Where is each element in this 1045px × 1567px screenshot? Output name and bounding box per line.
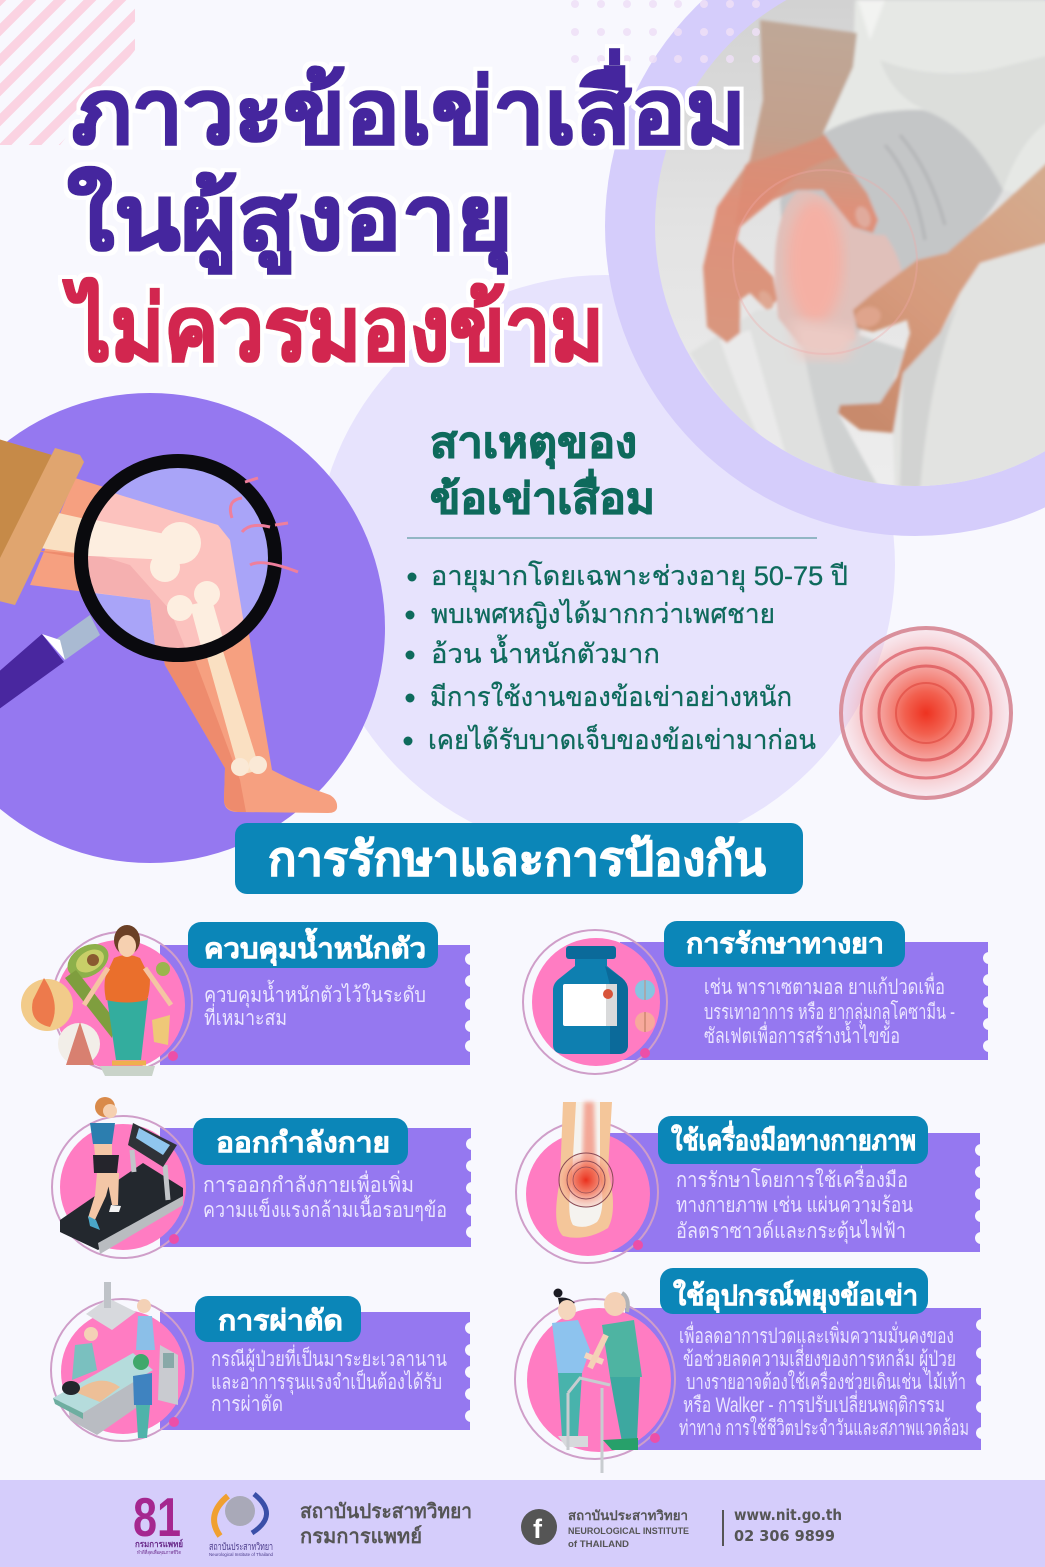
list: causes: มีการใช้งานของข้อเข่าอย่างหนัก	[430, 681, 792, 712]
card: surgery: การผ่าตัด	[218, 1305, 343, 1336]
purple circle with leg illustration	[0, 393, 385, 863]
facebook page name: NEUROLOGICAL INSTITUTE	[568, 1526, 689, 1536]
card: physical therapy: การรักษาโดยการใช้เครื่องมือ	[676, 1165, 908, 1192]
lower-left fabric	[690, 310, 903, 490]
card: physical therapy: อัลตราซาวด์และกระตุ้นไฟฟ้า	[676, 1219, 906, 1244]
large pale circle behind causes	[315, 275, 895, 855]
card: surgery: กรณีผู้ป่วยที่เป็นมาระยะเวลานาน	[211, 1344, 447, 1372]
icon: avocado	[61, 937, 115, 985]
card: physical therapy: ทางกายภาพ เช่น แผ่นความร้อน	[676, 1194, 913, 1217]
card: knee support: ข้อช่วยลดความเสี่ยงของการหกล้ม ผู้ป่วย	[683, 1344, 956, 1372]
card: exercise: ความแข็งแรงกล้ามเนื้อรอบๆข้อ	[203, 1195, 447, 1222]
title line 2: ในผู้สูงอายุ	[67, 167, 513, 275]
card: knee support: หรือ Walker - การปรับเปลี่ยนพฤติกรรม	[683, 1390, 945, 1417]
icon: ankle with pain rings	[556, 1102, 613, 1238]
lower-right trouser	[892, 358, 1045, 486]
facebook page name: สถาบันประสาทวิทยา	[568, 1508, 688, 1523]
heading: causes: สาเหตุของ	[430, 419, 637, 469]
shirt	[825, 0, 1045, 200]
card: exercise: ออกกำลังกาย	[216, 1127, 390, 1158]
contact details: www.nit.go.th	[734, 1506, 842, 1524]
card: weight control: ที่เหมาะสม	[204, 1003, 287, 1030]
heading: treatment and prevention	[235, 823, 803, 894]
card: medication: เช่น พาราเซตามอล ยาแก้ปวดเพื่อ	[704, 972, 945, 999]
organisation name: สถาบันประสาทวิทยา	[300, 1501, 472, 1523]
title line 3: ไม่ควรมองข้าม	[63, 278, 604, 380]
list: causes: พบเพศหญิงได้มากกว่าเพศชาย	[431, 599, 775, 629]
list: causes: เคยได้รับบาดเจ็บของข้อเข่ามาก่อน	[428, 722, 816, 755]
icon: runner	[88, 1097, 121, 1230]
card: knee support	[515, 1268, 988, 1473]
card: physical therapy	[516, 1102, 987, 1263]
heading: causes	[430, 419, 655, 522]
icon: salmon	[21, 978, 73, 1031]
icon: bacon	[58, 1022, 100, 1065]
icon: sleeve	[0, 438, 84, 605]
title line 1: ภาวะข้อเข่าเสื่อม	[72, 49, 746, 163]
icon: elderly patient with walker	[568, 1292, 642, 1473]
icon: facebook: f	[533, 1514, 543, 1544]
icon: woman on scale	[84, 925, 171, 1076]
facebook page name	[568, 1508, 689, 1549]
icon: medicine bottle	[553, 946, 628, 1054]
thigh	[780, 110, 1003, 345]
icon: magnifier lens	[74, 454, 298, 662]
card: weight control: ควบคุมน้ำหนักตัวไว้ในระดับ	[204, 980, 426, 1008]
list: causes: อายุมากโดยเฉพาะช่วงอายุ 50-75 ปี	[431, 561, 848, 593]
card: surgery: และอาการรุนแรงจำเป็นต้องได้รับ	[211, 1368, 442, 1395]
logo: neurological institute: Neurological Institute of Thailand	[209, 1552, 273, 1557]
logo: 81 years: กรมการแพทย์	[135, 1538, 183, 1549]
knee	[775, 191, 905, 345]
icon: pain target	[841, 628, 1011, 798]
decorative dots	[571, 0, 760, 63]
card: surgery: การผ่าตัด	[211, 1393, 283, 1416]
card: exercise: การออกกำลังกายเพื่อเพิ่ม	[203, 1170, 414, 1197]
card: medication: การรักษาทางยา	[686, 928, 884, 959]
logo: neurological institute	[209, 1494, 273, 1557]
icon: surgery scene	[53, 1282, 178, 1438]
icon: pills	[635, 980, 655, 1032]
icon: magnifier handle	[0, 615, 100, 712]
organisation name	[300, 1501, 472, 1548]
decorative pink stripes	[0, 0, 135, 145]
logo: 81 years: ทำดีที่สุดเพื่อคุณภาพชีวิต	[137, 1549, 181, 1556]
card: medication: ซัลเฟตเพื่อการสร้างน้ำไขข้อ	[704, 1021, 900, 1048]
list: causes: อ้วน น้ำหนักตัวมาก	[431, 634, 660, 669]
heading: causes: ข้อเข่าเสื่อม	[430, 469, 655, 522]
icon: facebook	[521, 1509, 557, 1545]
left arm and hand	[703, 20, 878, 343]
organisation name: กรมการแพทย์	[300, 1525, 422, 1548]
footer	[0, 1480, 1045, 1567]
card: exercise	[52, 1097, 478, 1258]
contact details	[734, 1506, 842, 1545]
card: weight control: ควบคุมน้ำหนักตัว	[204, 927, 426, 966]
card: knee support: ใช้อุปกรณ์พยุงข้อเข่า	[673, 1279, 918, 1313]
icon: nurse	[552, 1288, 603, 1447]
icon: treadmill	[60, 1123, 183, 1254]
card: surgery	[51, 1282, 477, 1441]
card: knee support: เพื่อลดอาการปวดและเพิ่มความมั่นคงของ	[679, 1321, 954, 1348]
logo: 81 years: 81	[133, 1486, 181, 1548]
photo: hands holding knee	[640, 0, 1045, 500]
facebook page name: of THAILAND	[568, 1539, 630, 1549]
photo ring	[605, 0, 1045, 536]
title	[63, 49, 746, 380]
card: medication	[523, 921, 995, 1074]
contact details: 02 306 9899	[734, 1527, 835, 1545]
card: weight control	[21, 922, 477, 1076]
heading: treatment and prevention: การรักษาและการป้องกัน	[268, 832, 766, 885]
logo: neurological institute: สถาบันประสาทวิทยา	[209, 1542, 273, 1553]
card: physical therapy: ใช้เครื่องมือทางกายภาพ	[671, 1120, 916, 1156]
list: causes	[404, 561, 848, 755]
icon: leg	[30, 478, 337, 813]
right arm and hand	[838, 160, 1045, 433]
